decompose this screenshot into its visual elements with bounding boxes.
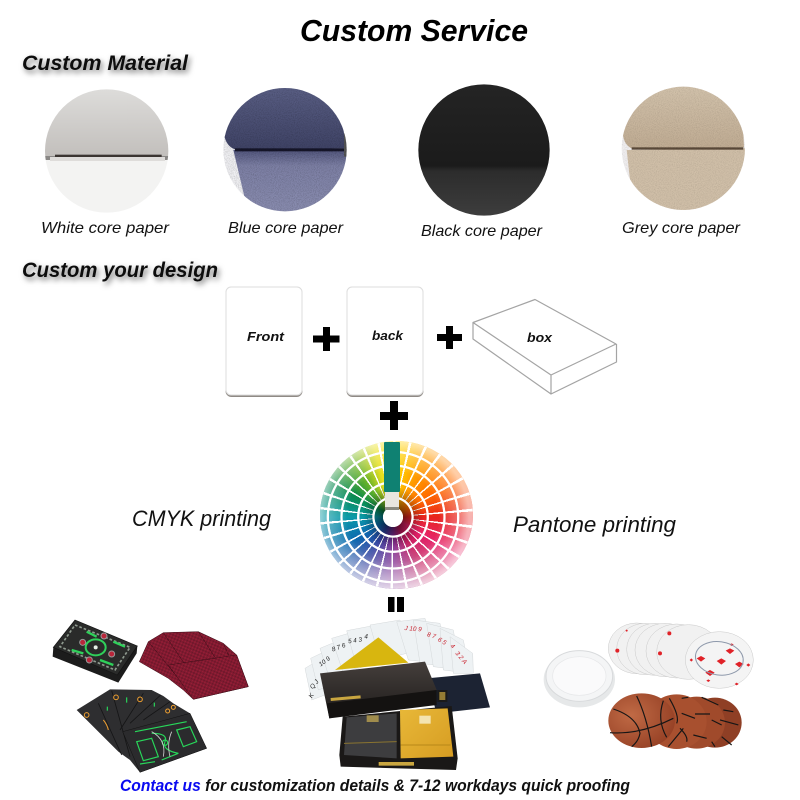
white card fan [305,618,473,700]
navy card [427,673,490,713]
pantone guide tab [384,442,400,492]
card indices: J 10 9 [403,625,422,634]
card: front: Front [247,329,285,344]
white ring gaps [320,441,473,589]
swatch: grey core paper [620,85,747,212]
heading: custom material: Custom Material [22,52,189,75]
yellow card [335,637,408,670]
plus sign [437,326,462,349]
product: black and red cards [53,620,248,772]
card indices: 8 7 6 [331,642,347,654]
card ring [693,638,745,678]
label: blue core paper: Blue core paper [228,220,344,237]
equals sign [388,597,404,612]
plus sign [380,401,408,430]
label: black core paper: Black core paper [421,223,543,240]
box outline [473,300,616,394]
card indices: 6 5 [436,636,448,647]
card pips [615,630,750,685]
card indices: 5 4 3 [348,636,363,645]
label: pantone printing: Pantone printing [513,512,677,537]
label: white core paper: White core paper [41,220,170,237]
clear case [544,651,615,707]
swatch: blue core paper [222,85,348,215]
tonal rings [320,441,473,589]
tab clasp [385,492,399,510]
swatch: white core paper [43,87,170,213]
red card fan [139,632,248,699]
card indices [308,625,468,699]
panel: design parts [226,287,616,430]
card indices: 8 7 [426,631,437,641]
plus sign [313,327,340,351]
card indices: 4 [364,633,368,640]
card indices: 3 2 A [453,650,468,666]
heading: custom your design: Custom your design [22,259,218,282]
black card fan [77,689,207,772]
title: Custom Service [300,13,528,48]
card: back: back [372,328,404,343]
card indices: K [308,692,316,699]
card box [53,620,137,683]
card indices: 4 [449,643,456,651]
box outline: box [527,330,553,345]
product: round cards [544,623,753,749]
footer text: Contact us for customization details & 7-12 workdays quick proofing [120,777,630,795]
card indices: Q J [309,678,321,691]
label: cmyk printing: CMYK printing [132,506,272,531]
panel: material swatches [41,84,747,240]
open box with decks [339,706,458,770]
swatch: black core paper [418,84,550,216]
label: grey core paper: Grey core paper [622,220,741,237]
black box lid [320,662,447,718]
swatch gaps [320,441,473,589]
color wheel [320,441,473,589]
round card stack [608,623,753,688]
card indices: 10 9 [318,655,332,668]
product: boxed poker set [305,618,490,770]
card: front [226,287,302,397]
card: back [346,287,424,397]
wheel hues [320,441,473,589]
basketball cards [608,693,742,749]
